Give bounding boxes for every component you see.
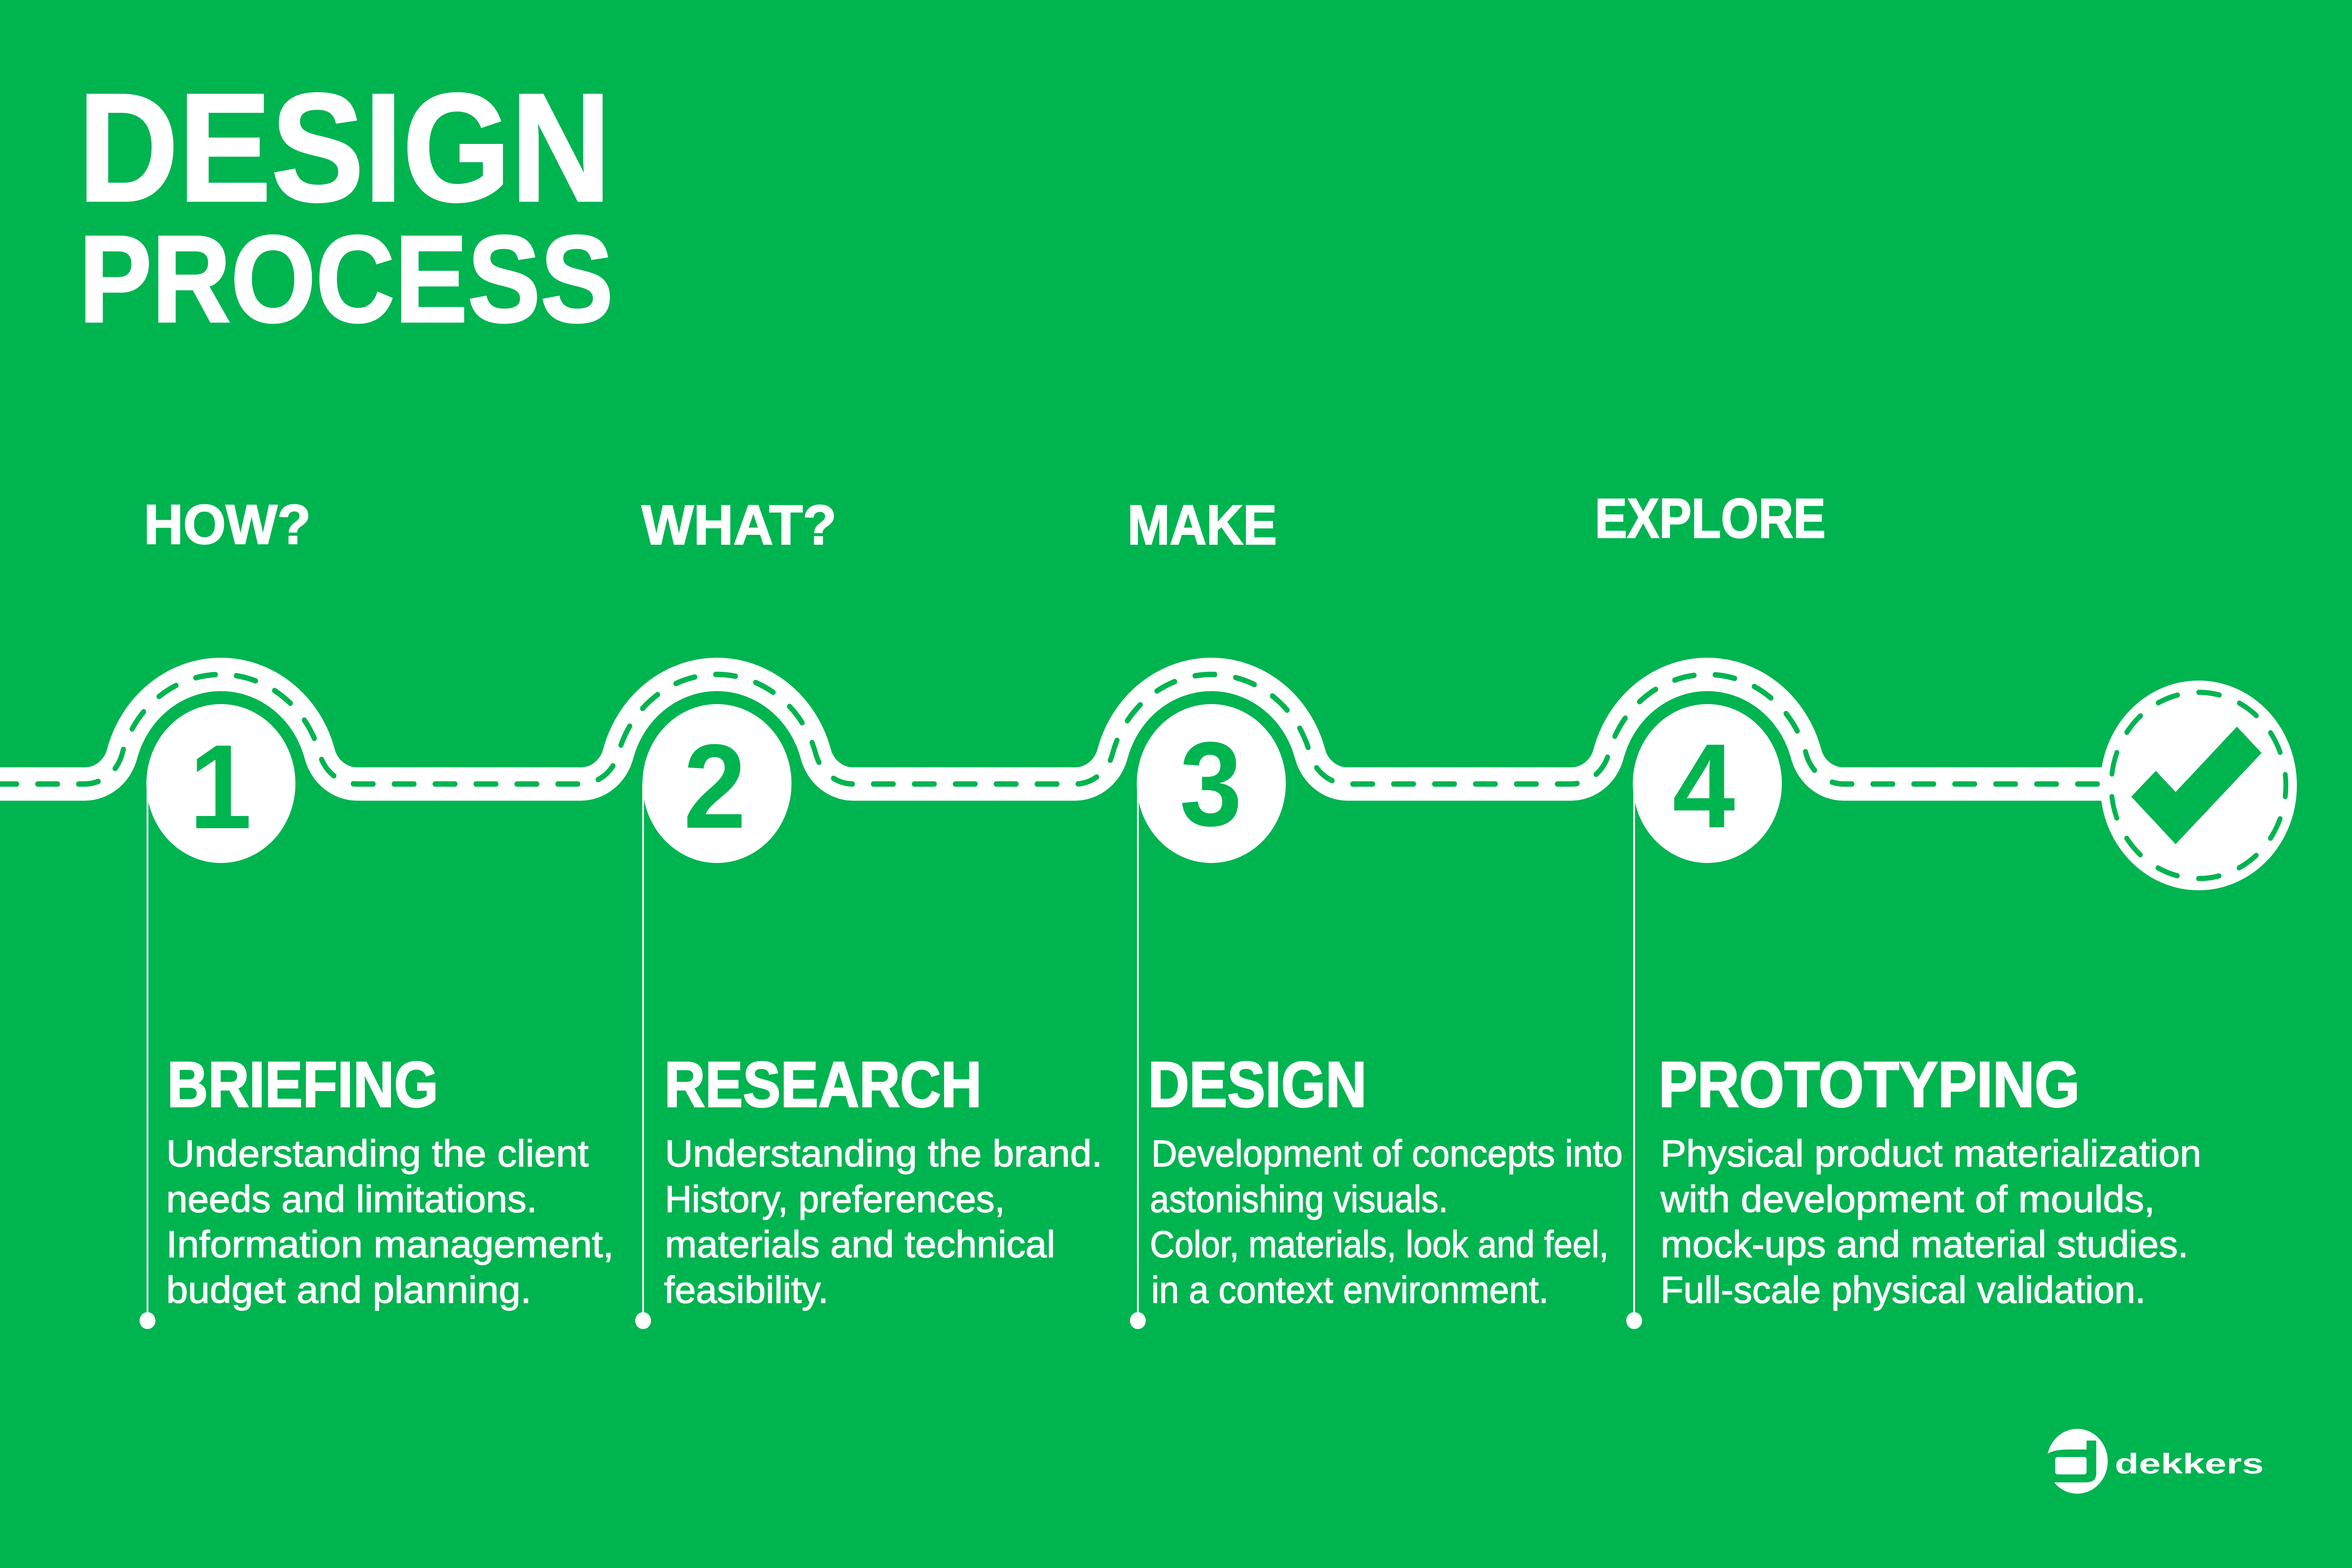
leader 2 bbox=[635, 784, 651, 1329]
badge 2 bbox=[643, 704, 792, 863]
badge 3 bbox=[1137, 704, 1286, 863]
body text bbox=[166, 1133, 614, 1311]
badge 1: 1 bbox=[189, 720, 252, 854]
heading: RESEARCH bbox=[664, 1049, 982, 1121]
panel: prototyping bbox=[1659, 1049, 2201, 1311]
tag: what: WHAT? bbox=[642, 494, 836, 556]
body text: mock-ups and material studies. bbox=[1661, 1224, 2188, 1266]
body text: Understanding the client bbox=[166, 1133, 588, 1175]
leader 1 bbox=[140, 784, 155, 1329]
logo: dekkers bbox=[2046, 1429, 2264, 1494]
body text bbox=[1660, 1133, 2201, 1311]
road surface bbox=[0, 674, 2116, 784]
body text: Information management, bbox=[166, 1224, 614, 1266]
body text: in a context environment. bbox=[1152, 1269, 1549, 1311]
tag: explore: EXPLORE bbox=[1595, 488, 1826, 550]
body text bbox=[664, 1133, 1102, 1311]
logo mark bbox=[2046, 1429, 2108, 1494]
body text: Color, materials, look and feel, bbox=[1150, 1224, 1609, 1266]
badge 4: 4 bbox=[1673, 719, 1735, 853]
panel: design bbox=[1148, 1049, 1623, 1311]
body text: with development of moulds, bbox=[1660, 1179, 2155, 1220]
road with arches bbox=[0, 674, 2116, 784]
badge 1 bbox=[146, 704, 295, 863]
body text: feasibility. bbox=[664, 1269, 828, 1311]
title bbox=[78, 62, 613, 348]
body text bbox=[1150, 1133, 1623, 1311]
panel: research bbox=[664, 1049, 1102, 1311]
finish badge with checkmark bbox=[2100, 681, 2297, 890]
heading: PROTOTYPING bbox=[1659, 1049, 2080, 1121]
heading: BRIEFING bbox=[167, 1049, 438, 1121]
leader 4 bbox=[1626, 784, 1642, 1329]
tag: how: HOW? bbox=[144, 494, 311, 556]
logo wordmark: dekkers bbox=[2115, 1448, 2264, 1480]
title line: PROCESS: PROCESS bbox=[79, 210, 613, 348]
step tags above road bbox=[144, 488, 1826, 556]
tag: make: MAKE bbox=[1128, 494, 1277, 556]
body text: Physical product materialization bbox=[1661, 1133, 2201, 1175]
panel: briefing bbox=[166, 1049, 614, 1311]
heading: DESIGN bbox=[1148, 1049, 1367, 1121]
body text: Development of concepts into bbox=[1152, 1133, 1623, 1175]
body text: needs and limitations. bbox=[166, 1179, 537, 1220]
body text: Full-scale physical validation. bbox=[1661, 1269, 2145, 1311]
road centre dashes bbox=[0, 674, 2099, 784]
step number badges bbox=[146, 704, 1782, 863]
icon: check mark bbox=[2131, 727, 2262, 844]
badge 2: 2 bbox=[683, 720, 746, 854]
body text: astonishing visuals. bbox=[1150, 1179, 1448, 1220]
badge 4 bbox=[1633, 704, 1782, 863]
leader 3 bbox=[1130, 784, 1146, 1329]
badge 3: 3 bbox=[1180, 717, 1242, 851]
body text: budget and planning. bbox=[166, 1269, 532, 1311]
title line: DESIGN: DESIGN bbox=[78, 62, 611, 234]
body text: History, preferences, bbox=[665, 1179, 1005, 1220]
leader lines with end dots bbox=[140, 784, 1642, 1329]
body text: Understanding the brand. bbox=[665, 1133, 1102, 1175]
body text: materials and technical bbox=[665, 1224, 1055, 1266]
